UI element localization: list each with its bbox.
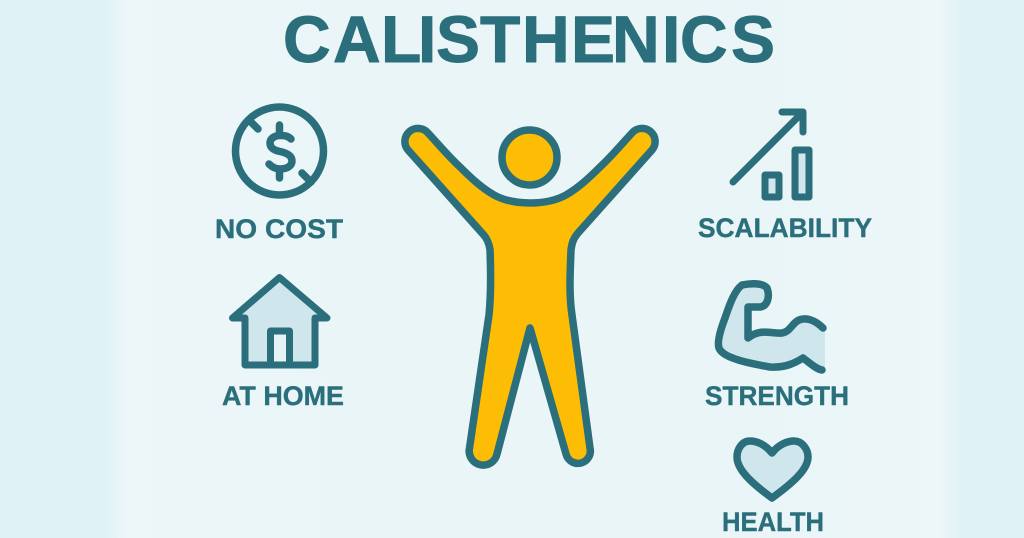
label: health: HEALTH — [722, 507, 824, 537]
icon: heart — [737, 441, 808, 498]
label: no cost: NO COST — [215, 214, 344, 244]
label: scalability: SCALABILITY — [698, 213, 872, 243]
figure head — [502, 130, 557, 185]
label: strength: STRENGTH — [705, 381, 849, 411]
label: at home: AT HOME — [222, 381, 344, 411]
title: CALISTHENICS — [283, 2, 775, 76]
icon: flexed arm — [718, 284, 825, 370]
icon: scalability — [733, 112, 809, 197]
central figure — [405, 128, 655, 465]
figure body — [405, 128, 655, 465]
icon: house — [232, 278, 327, 365]
icon: no cost — [236, 107, 324, 195]
